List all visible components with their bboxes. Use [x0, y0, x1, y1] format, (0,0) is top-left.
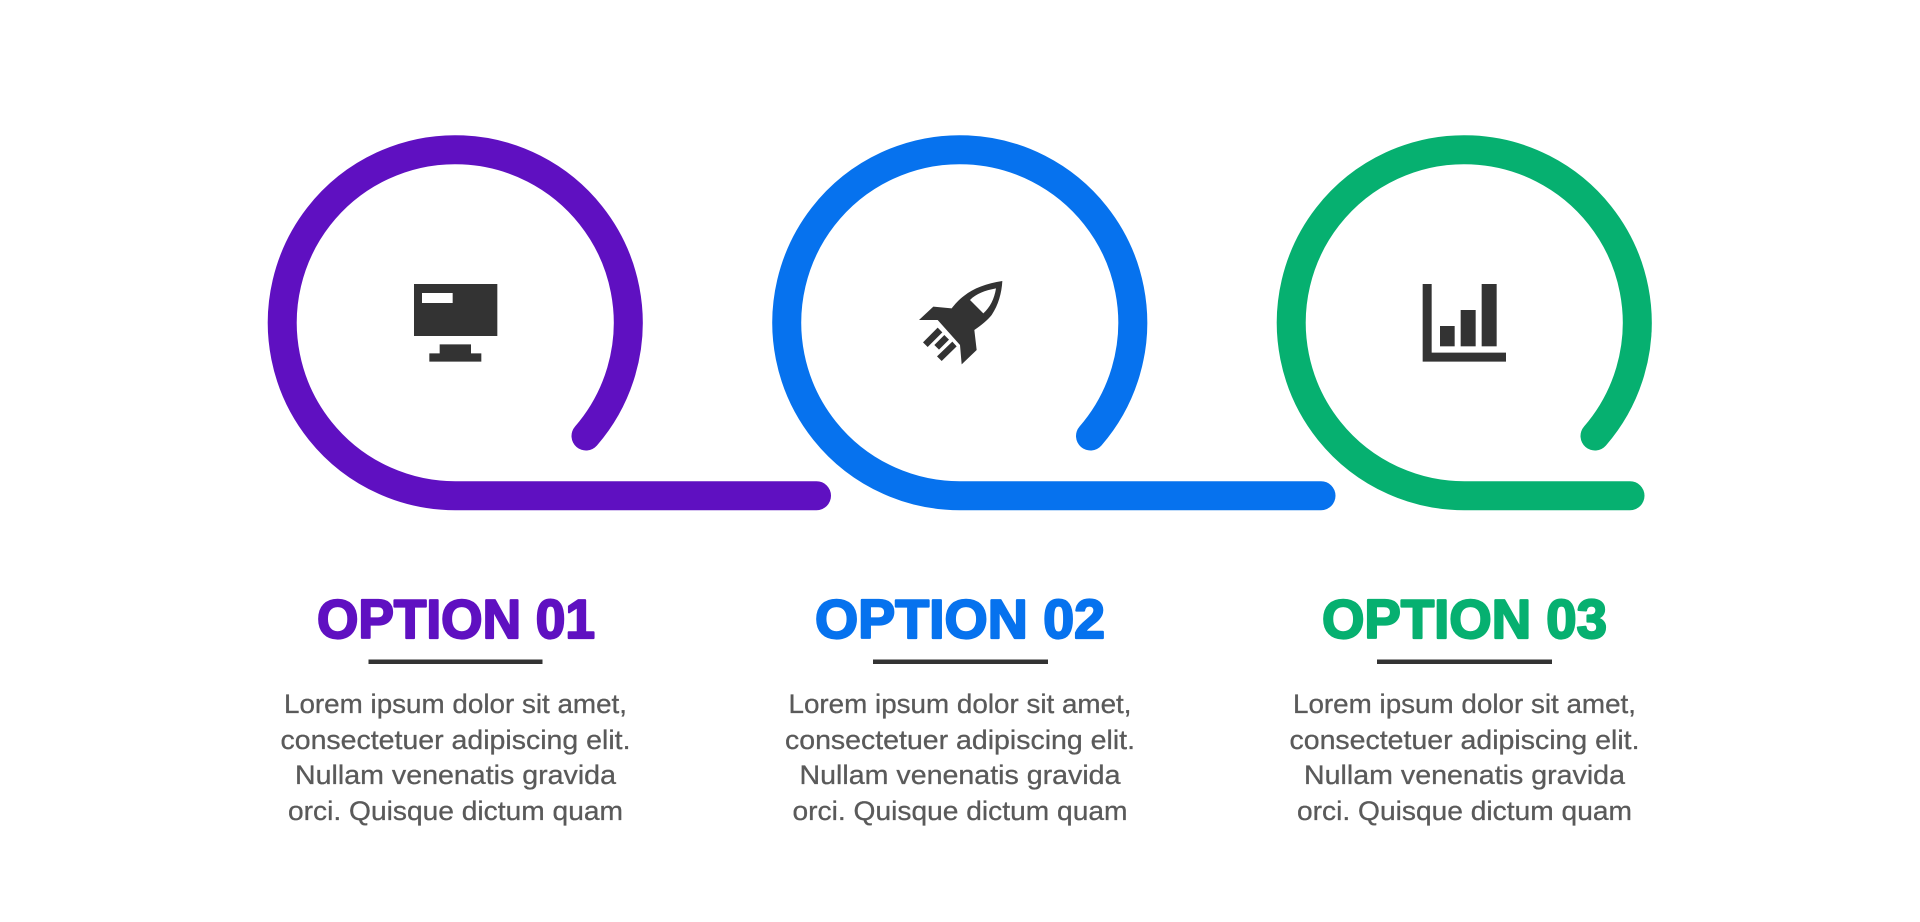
text block: option 03: Lorem ipsum dolor sit amet, — [1293, 689, 1636, 719]
panel: option 03 — [1290, 150, 1640, 826]
text block: option 02: Lorem ipsum dolor sit amet, — [788, 689, 1132, 719]
text block: option 02: Nullam venenatis gravida — [800, 760, 1122, 790]
text block: option 02: consectetuer adipiscing elit. — [785, 725, 1135, 755]
text block: option 02 — [785, 689, 1135, 826]
text block: option 03: Nullam venenatis gravida — [1304, 760, 1626, 790]
heading: option 02: OPTION 02 — [815, 588, 1105, 650]
text block: option 02: orci. Quisque dictum quam — [792, 796, 1128, 826]
divider: option 03 — [1377, 660, 1552, 664]
icon: rocket — [919, 281, 1002, 364]
divider: option 01 — [368, 660, 542, 664]
icon: monitor — [414, 284, 497, 362]
panel: option 01 — [280, 150, 816, 826]
heading: option 01: OPTION 01 — [317, 588, 595, 650]
text block: option 01 — [280, 689, 630, 826]
ring connector: green — [1291, 150, 1637, 496]
text block: option 01: Nullam venenatis gravida — [295, 760, 617, 790]
text block: option 01: orci. Quisque dictum quam — [288, 796, 623, 826]
heading: option 03: OPTION 03 — [1322, 588, 1607, 650]
panel: option 02 — [785, 150, 1321, 826]
text block: option 03 — [1290, 689, 1640, 826]
ring connector: blue — [787, 150, 1321, 496]
divider: option 02 — [873, 660, 1048, 664]
text block: option 03: consectetuer adipiscing elit. — [1290, 725, 1640, 755]
text block: option 03: orci. Quisque dictum quam — [1297, 796, 1632, 826]
icon: bar chart — [1423, 284, 1506, 362]
text block: option 01: consectetuer adipiscing elit. — [280, 725, 630, 755]
ring connector: purple — [282, 150, 816, 496]
text block: option 01: Lorem ipsum dolor sit amet, — [284, 689, 627, 719]
